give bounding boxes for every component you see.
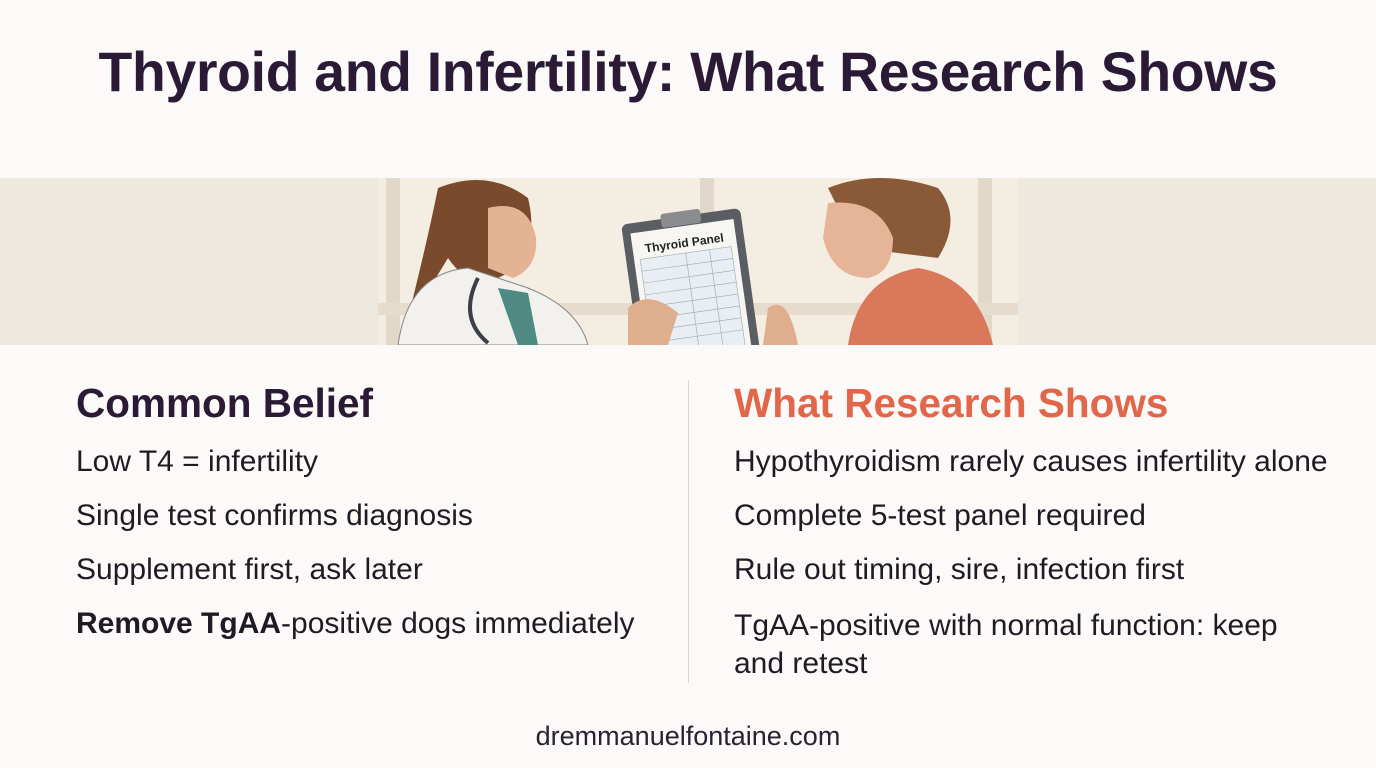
clipboard: Thyroid Panel [644, 231, 725, 256]
text: Rule out timing, sire, infection first [734, 553, 1184, 586]
text: Single test confirms diagnosis [76, 499, 473, 532]
heading: what research shows: What Research Shows [734, 380, 1168, 426]
clipboard [620, 203, 761, 373]
heading: common belief: Common Belief [76, 380, 373, 426]
text: TgAA-positive with normal function: keep and retest [734, 609, 1278, 680]
text: Complete 5-test panel required [734, 499, 1146, 532]
text: Remove TgAA-positive dogs immediately [76, 607, 635, 640]
title: Thyroid and Infertility: What Research Shows [99, 41, 1277, 103]
patient [823, 178, 993, 345]
banner [0, 178, 1376, 345]
text: Low T4 = infertility [76, 445, 318, 478]
divider [688, 380, 689, 683]
text: Hypothyroidism rarely causes infertility alone [734, 445, 1328, 478]
panel: what research shows [734, 380, 1328, 680]
illustration: doctor and patient reviewing thyroid panel [378, 178, 1018, 345]
panel: common belief [76, 380, 635, 640]
footer: dremmanuelfontaine.com [536, 721, 840, 751]
text: Supplement first, ask later [76, 553, 423, 586]
doctor [398, 180, 588, 345]
